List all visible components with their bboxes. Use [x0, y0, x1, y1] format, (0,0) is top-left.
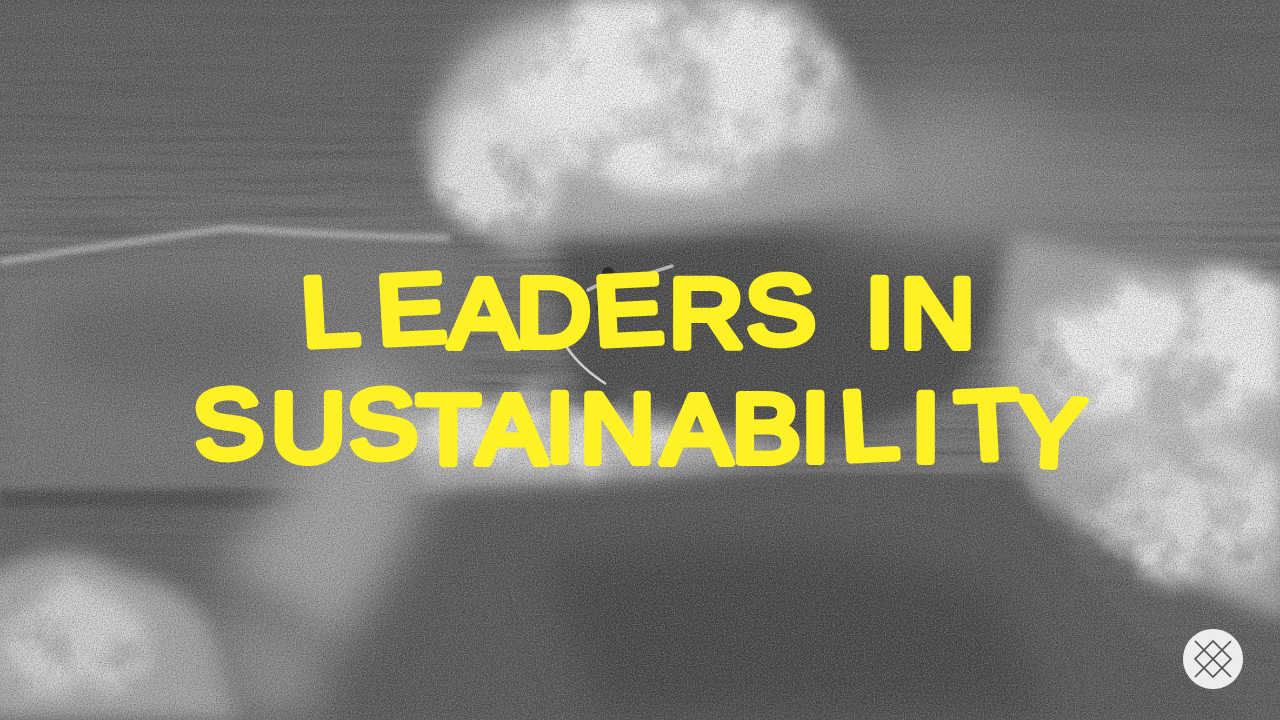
title: [189, 254, 1088, 489]
spray band under title: [390, 407, 810, 490]
spray drift right: [800, 105, 1060, 235]
surfer: [560, 266, 672, 384]
spray column left of title: [215, 362, 430, 650]
rippled open sea: [0, 0, 1280, 230]
main spray cloud: texture: [500, 0, 840, 190]
dark barrel: [559, 228, 1005, 452]
right whitewater: texture: [1030, 285, 1280, 425]
dark lower wave face: [250, 473, 1250, 720]
logo badge: [1183, 629, 1243, 689]
wave face left: [0, 244, 470, 490]
wave crest line: [0, 228, 450, 262]
title word: in: IN: [865, 259, 975, 368]
title line 1: LEADERS: [298, 254, 818, 368]
main spray cloud: base: [420, 0, 900, 253]
dark band left: [0, 490, 400, 508]
title line 2: SUSTAINABILITY: [189, 368, 1088, 489]
bottom-left foam: [0, 552, 240, 720]
right whitewater: base: [1000, 235, 1280, 620]
icon: lattice mark: [1195, 641, 1231, 677]
